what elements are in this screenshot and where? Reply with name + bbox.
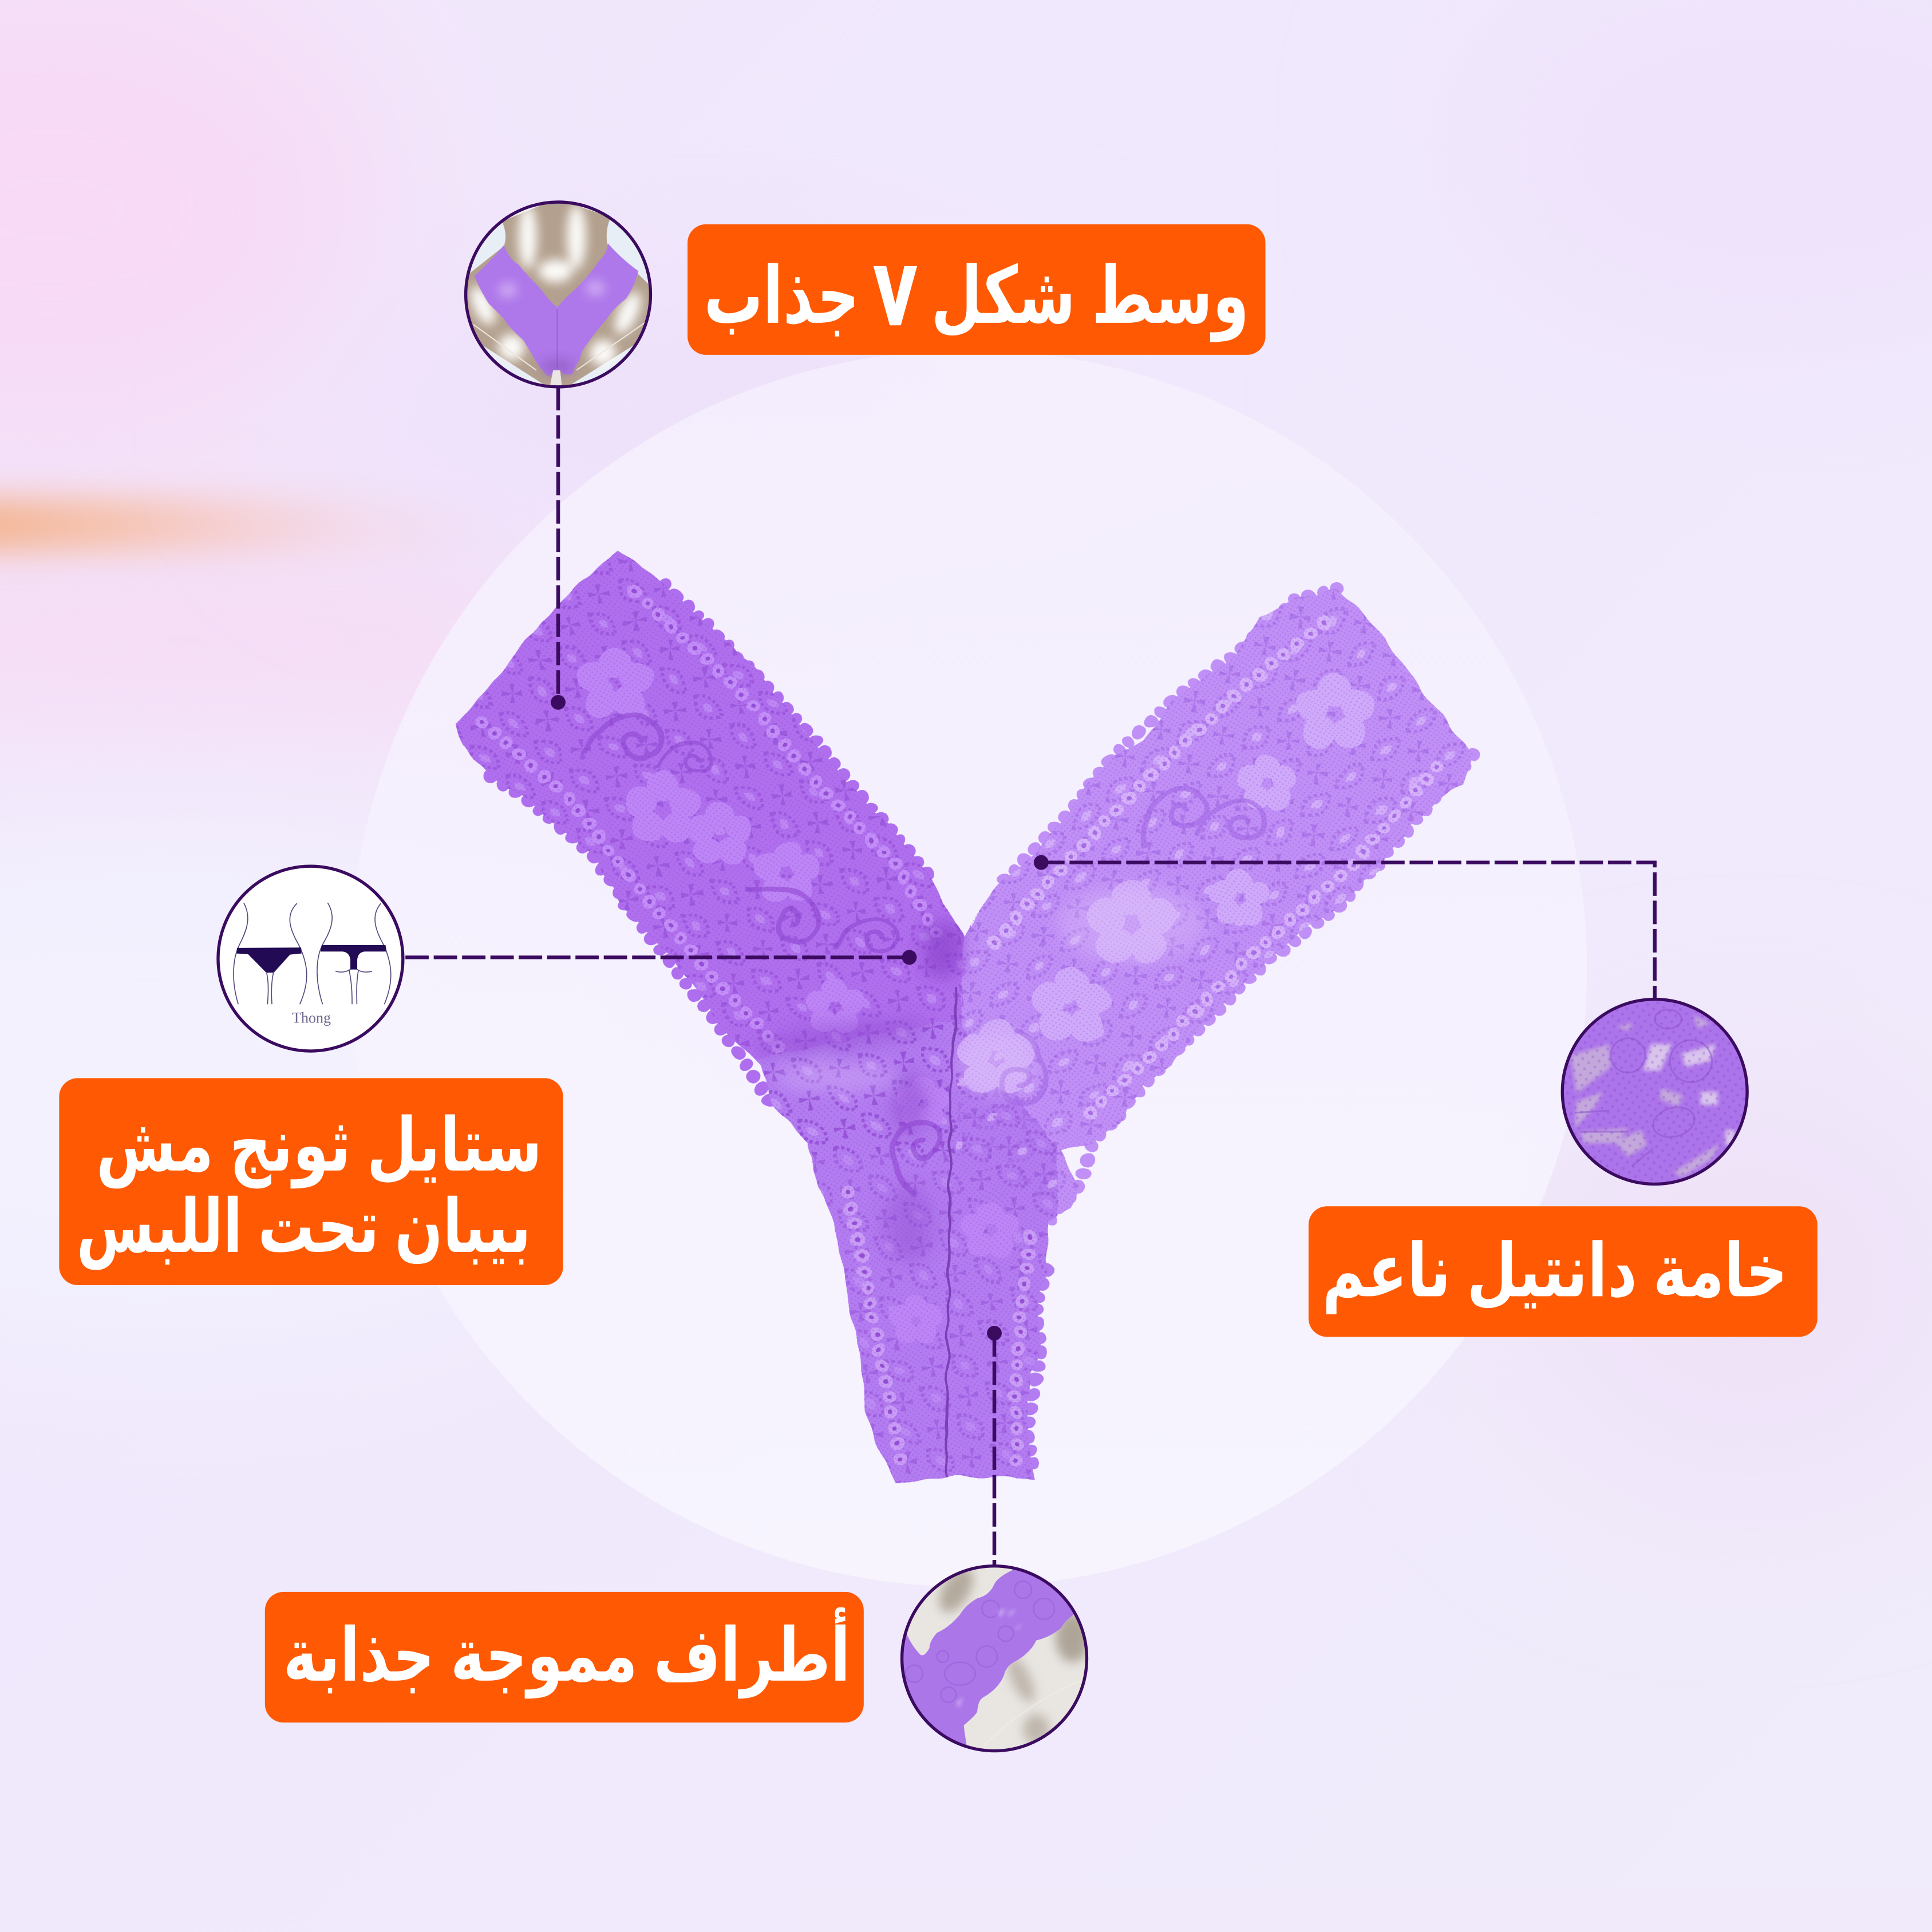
icon: thong style diagram — [218, 866, 403, 1051]
scalloped ring borders — [482, 592, 1437, 1467]
left lace arm — [429, 515, 970, 1154]
label: thong style: بيبان تحت اللبس — [77, 1186, 531, 1270]
callout: wavy edges leader line — [987, 1326, 1002, 1566]
icon: thong style diagram: Thong — [292, 1009, 331, 1026]
label: soft lace fabric: خامة دانتيل ناعم — [1322, 1229, 1788, 1315]
central light disc — [350, 350, 1587, 1587]
label: wavy edges — [265, 1592, 864, 1722]
callout: thong leader line — [405, 950, 916, 965]
callout: V waist leader line — [551, 387, 566, 710]
icon: lace fabric close-up — [1562, 999, 1747, 1184]
label: wavy edges: أطراف مموجة جذابة — [283, 1607, 850, 1699]
callout: lace fabric leader line — [1034, 855, 1655, 998]
icon: V waist thumbnail — [462, 199, 655, 393]
center seam — [946, 988, 956, 1477]
right lace arm — [956, 554, 1510, 1218]
label: thong style: ستايل ثونج مش — [96, 1104, 542, 1189]
lower lace panel — [753, 1020, 1057, 1493]
icon: wavy edge close-up — [893, 1562, 1090, 1764]
lace ornament — [429, 515, 1510, 1512]
label: thong style — [59, 1078, 563, 1285]
product: lace garment — [456, 551, 1480, 1484]
scalloped outer edges — [490, 586, 1473, 1467]
label: soft lace fabric — [1309, 1206, 1818, 1337]
label: V waist — [688, 224, 1266, 355]
fold shadows — [752, 886, 1206, 1263]
label: V waist: وسط شكل V جذاب — [704, 251, 1249, 342]
